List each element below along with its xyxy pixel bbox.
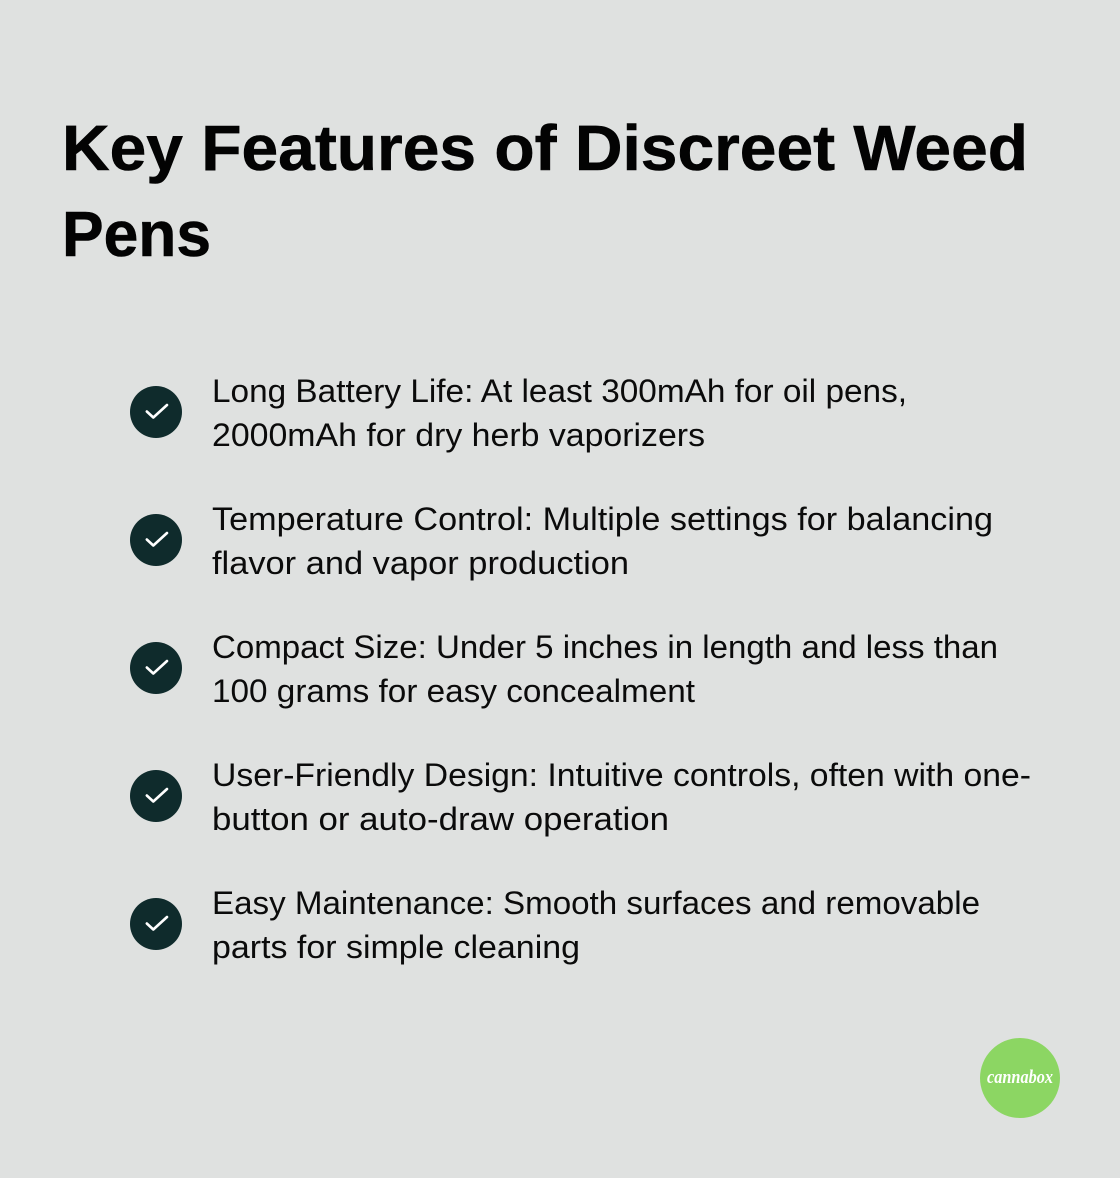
feature text: flavor and vapor production bbox=[212, 545, 629, 581]
feature text bbox=[212, 885, 980, 965]
icon: check badge bbox=[130, 770, 182, 822]
feature: compact size bbox=[130, 629, 998, 709]
icon: check badge bbox=[130, 386, 182, 438]
feature text bbox=[212, 501, 993, 581]
feature text bbox=[212, 757, 1031, 837]
feature text: Temperature Control: Multiple settings for balancing bbox=[212, 501, 993, 537]
icon: check badge bbox=[130, 514, 182, 566]
title bbox=[62, 112, 1028, 270]
feature text: User-Friendly Design: Intuitive controls, often with one- bbox=[212, 757, 1031, 793]
feature text: Easy Maintenance: Smooth surfaces and removable bbox=[212, 885, 980, 921]
feature: long battery life bbox=[130, 373, 907, 453]
feature text: Compact Size: Under 5 inches in length and less than bbox=[212, 629, 998, 665]
icon: check badge bbox=[130, 898, 182, 950]
logo: cannabox badge bbox=[980, 1038, 1060, 1118]
feature text: 100 grams for easy concealment bbox=[212, 673, 695, 709]
icon: check badge bbox=[130, 642, 182, 694]
feature text: 2000mAh for dry herb vaporizers bbox=[212, 417, 705, 453]
feature text bbox=[212, 629, 998, 709]
feature text: button or auto-draw operation bbox=[212, 801, 669, 837]
feature text: Long Battery Life: At least 300mAh for oil pens, bbox=[212, 373, 907, 409]
feature text: parts for simple cleaning bbox=[212, 929, 580, 965]
logo: cannabox badge: cannabox bbox=[987, 1067, 1053, 1088]
title: Key Features of Discreet Weed bbox=[62, 112, 1028, 184]
feature list bbox=[130, 373, 1031, 965]
feature: user-friendly design bbox=[130, 757, 1031, 837]
feature: easy maintenance bbox=[130, 885, 980, 965]
feature text bbox=[212, 373, 907, 453]
feature: temperature control bbox=[130, 501, 993, 581]
title: Pens bbox=[62, 198, 211, 270]
